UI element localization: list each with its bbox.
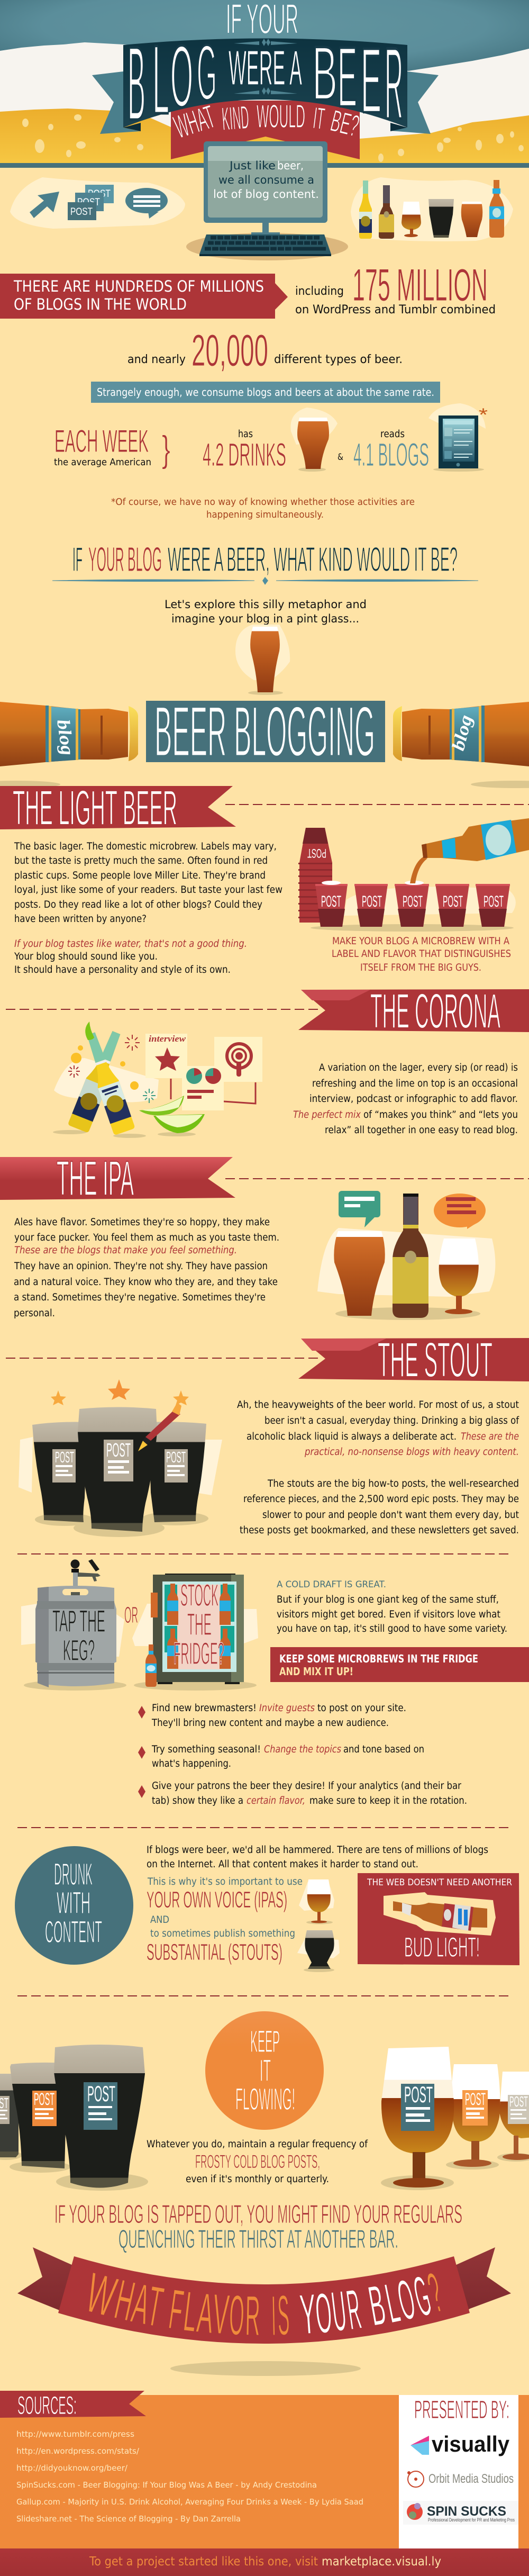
- text: stout body: These are the: [461, 1431, 519, 1442]
- icon: stacked posts: POST: [70, 206, 93, 218]
- front bottle: [80, 1030, 135, 1135]
- ribbon: what flavor is your blog: B: [364, 2273, 390, 2338]
- source list: http://en.wordpress.com/stats/: [16, 2446, 140, 2456]
- foam: [0, 42, 529, 139]
- icon: stacked posts: POST: [77, 197, 100, 208]
- source list: http://www.tumblr.com/press: [16, 2429, 134, 2439]
- banner: hundreds of millions of blogs: THERE ARE HUNDREDS OF MILLIONS: [13, 277, 264, 295]
- orange bottle: [489, 180, 504, 238]
- ribbon: what flavor is your blog: [17, 2247, 511, 2347]
- heading: if your blog were a beer: [72, 540, 458, 579]
- badge: keep it flowing: IT: [260, 2054, 271, 2088]
- red sub ribbon with WHAT KIND WOULD IT BE?: IT: [311, 101, 326, 136]
- cup 4: POST: [443, 893, 463, 910]
- bullet: change the topics: and tone based on: [343, 1744, 424, 1755]
- pencil: [138, 1403, 181, 1451]
- illustration: five post cups: [311, 881, 516, 932]
- shadow under ribbon: [170, 2361, 361, 2376]
- stat: 20,000 types of beer: and nearly: [127, 353, 186, 366]
- icon: desktop computer with text: lot of blog content.: [213, 188, 319, 201]
- bullet: invite guests: Find new brewmasters!: [152, 1703, 257, 1714]
- card: infographic: [182, 1066, 224, 1110]
- source list: SpinSucks.com - Beer Blogging: If Your Blog Was A Beer - by Andy Crestodina: [16, 2480, 317, 2490]
- text: light beer body: If your blog tastes like water, that's not a good thing.: [14, 938, 247, 950]
- beer bubbles: [22, 114, 524, 162]
- bullet: certain flavor: certain flavor,: [247, 1795, 305, 1806]
- red sub ribbon with WHAT KIND WOULD IT BE?: KIND: [221, 100, 250, 138]
- illustration: bottle by fridge: [145, 1644, 157, 1687]
- cup 5: [476, 884, 510, 927]
- text: a cold draft: A COLD DRAFT IS GREAT.: [277, 1579, 386, 1590]
- bottle: [393, 1194, 428, 1318]
- text: corona body: [293, 1062, 518, 1136]
- cup 5: POST: [484, 893, 504, 910]
- callout: keep some microbrews: AND MIX IT UP!: [279, 1665, 353, 1678]
- cup 2: POST: [362, 893, 382, 910]
- caption: microbrew: MAKE YOUR BLOG A MICROBREW WITH A: [332, 936, 509, 947]
- ribbon: what flavor is your blog: R: [343, 2277, 364, 2342]
- illustration: keg: TAP THE: [52, 1604, 105, 1639]
- ribbon: what flavor is your blog: I: [271, 2284, 276, 2347]
- illustration: fridge: THE: [187, 1607, 212, 1642]
- red sub ribbon with WHAT KIND WOULD IT BE?: [170, 98, 362, 159]
- banner: sources: SOURCES:: [17, 2392, 77, 2420]
- card: interview: [145, 1034, 187, 1078]
- wine glass: [402, 202, 421, 230]
- illustration: row of beers: [351, 177, 513, 241]
- illustration: three stouts with stars and pencil: [19, 1379, 222, 1537]
- ribbon: what flavor is your blog: U: [329, 2279, 350, 2343]
- badge: keep it flowing: KEEP: [250, 2024, 280, 2059]
- goblet far: [499, 2072, 529, 2160]
- logo: spin sucks: SPIN SUCKS: [427, 2504, 506, 2519]
- footnote: *Of course, we have no way of knowing whether those activities are: [111, 496, 415, 508]
- banner: the stout: [298, 1332, 529, 1387]
- tap: [71, 1559, 101, 1587]
- text: light beer body: plastic cups. Some people love Miller Lite. They're brand: [14, 870, 266, 881]
- banner: the light beer: [0, 780, 236, 835]
- divider with diamond: [52, 577, 478, 585]
- text: ipa body: These are the blogs that make you feel something.: [14, 1245, 237, 1256]
- card: interview: interview: [149, 1034, 186, 1044]
- caption: microbrew: [332, 936, 511, 973]
- badge: keep it flowing: FLOWING!: [235, 2082, 295, 2117]
- illustration: stacked red cups: [298, 828, 332, 923]
- left stout: [32, 1422, 87, 1522]
- illustration: corona bottles, lime and content cards: [53, 1022, 262, 1138]
- goblet big: [381, 2047, 454, 2188]
- stat: 4.2 drinks: 4.2 DRINKS: [203, 437, 286, 473]
- header scene: sky, foam and beer: [0, 0, 529, 168]
- wine glass: [439, 1239, 479, 1297]
- bullet: change the topics: Try something seasonal!: [151, 1744, 261, 1755]
- icon: stacked posts: POST: [88, 188, 111, 200]
- stat: 4.2 drinks: has: [238, 429, 253, 440]
- text: ipa body: your face pucker. You feel them as much as you taste them.: [14, 1232, 279, 1243]
- heading: if your blog were a beer: IF: [72, 540, 83, 579]
- pint: [334, 1231, 385, 1316]
- text: a cold draft: [277, 1579, 507, 1634]
- bullet: change the topics: what's happening.: [152, 1758, 231, 1769]
- text: light beer body: have been written by anyone?: [14, 914, 147, 925]
- logo: spin sucks: [403, 2501, 518, 2525]
- banner: the corona: [298, 983, 529, 1038]
- title ribbon: BLOG WERE A BEER: B: [312, 31, 338, 116]
- ribbon: what flavor is your blog: L: [380, 2271, 404, 2335]
- text: drunk with content body: on the Internet. All that content makes it harder to stand out.: [147, 1859, 418, 1870]
- illustration: three stouts left: [0, 2045, 148, 2191]
- red sub ribbon with WHAT KIND WOULD IT BE?: BE?: [327, 104, 362, 143]
- text: drunk with content body: to sometimes publish something: [150, 1928, 295, 1939]
- illustration: left bottle: blog: [53, 718, 77, 756]
- title ribbon: BLOG WERE A BEER: B: [127, 25, 145, 142]
- title ribbon: BLOG WERE A BEER: R: [385, 26, 403, 140]
- badge: drunk with content: CONTENT: [45, 1915, 102, 1949]
- panel: presented by: [399, 2395, 518, 2548]
- text: drunk with content body: AND: [150, 1914, 169, 1926]
- bullet: invite guests: [138, 1703, 406, 1729]
- cup 3: POST: [403, 893, 423, 910]
- bullet: invite guests: Invite guests: [259, 1703, 315, 1714]
- text: frosty cold blog posts: Whatever you do, maintain a regular frequency of: [147, 2139, 368, 2150]
- bullet: invite guests: to post on your site.: [317, 1703, 406, 1714]
- ribbon: what flavor is your blog: H: [110, 2267, 140, 2333]
- stat: 20,000 types of beer: 20,000: [191, 326, 268, 375]
- ribbon: what flavor is your blog: T: [143, 2274, 167, 2339]
- icon: speech bubble: [125, 188, 168, 219]
- text: ipa body: [14, 1217, 279, 1319]
- source list: Gallup.com - Majority in U.S. Drink Alcohol, Averaging Four Drinks a Week - By Lydia Saad: [16, 2497, 363, 2507]
- text: stout body: [237, 1399, 519, 1536]
- bullet: certain flavor: Give your patrons the beer they desire! If your analytics (and their bar: [152, 1780, 461, 1792]
- illustration: keg: KEG?: [63, 1633, 95, 1667]
- stars: [51, 1390, 66, 1405]
- cup 4: [435, 884, 469, 927]
- corona bottle: [359, 180, 372, 239]
- bullet: certain flavor: [138, 1780, 467, 1806]
- speech bubble orange: [434, 1194, 486, 1229]
- banner: the ipa: THE IPA: [57, 1151, 134, 1206]
- text: drunk with content body: [147, 1845, 488, 1965]
- text: corona body: The perfect mix: [293, 1109, 361, 1120]
- pint glass: [461, 202, 482, 237]
- text: ipa body: personal.: [14, 1308, 55, 1319]
- banner: the light beer: THE LIGHT BEER: [13, 780, 177, 835]
- illustration: three goblets right: [381, 2047, 529, 2190]
- stat: 20,000 types of beer: [127, 326, 403, 375]
- callout: same rate: Strangely enough, we consume blogs and beers at about the same rate.: [97, 386, 434, 399]
- callout: the web doesn't need another bud light: THE WEB DOESN'T NEED ANOTHER: [367, 1877, 512, 1888]
- illustration: left bottle: [0, 702, 138, 766]
- ribbon: what flavor is your blog: ?: [422, 2261, 449, 2325]
- icon: desktop computer with text: [186, 141, 348, 260]
- icon: stacked posts: [68, 185, 114, 220]
- text: drunk with content body: This is why it's so important to use: [147, 1876, 303, 1887]
- footnote: happening simultaneously.: [206, 509, 324, 520]
- stat: 175 million: including: [295, 285, 344, 298]
- stout glass: [428, 199, 454, 238]
- center stout: [78, 1407, 157, 1532]
- goblet middle: POST: [465, 2090, 486, 2109]
- title ribbon: BLOG WERE A BEER: [92, 25, 439, 142]
- badge: keep it flowing: [205, 2011, 324, 2130]
- banner: hundreds of millions of blogs: [0, 274, 288, 319]
- text: stout body: alcoholic black liquid is always a deliberate act.: [247, 1431, 457, 1442]
- lime wedges: [139, 1096, 184, 1115]
- bullet: change the topics: Change the topics: [264, 1744, 341, 1755]
- stat: 175 million: on WordPress and Tumblr combined: [295, 303, 496, 317]
- icon: desktop computer with text: Just like: [229, 159, 276, 172]
- text: light beer body: The basic lager. The domestic microbrew. Labels may vary,: [14, 841, 277, 852]
- source list: http://didyouknow.org/beer/: [16, 2463, 128, 2473]
- text: ipa body: Ales have flavor. Sometimes they're so hoppy, they make: [14, 1217, 270, 1228]
- illustration: fridge: [132, 1574, 258, 1691]
- ribbon: what flavor is your blog: S: [277, 2283, 290, 2347]
- text: ampersand: &: [338, 452, 343, 463]
- ribbon: what flavor is your blog: W: [80, 2261, 122, 2329]
- ribbon: what flavor is your blog: R: [245, 2284, 261, 2347]
- labels: POST: [55, 1449, 74, 1466]
- footnote: [111, 496, 415, 520]
- ribbon: what flavor is your blog: O: [228, 2283, 245, 2347]
- red sub ribbon with WHAT KIND WOULD IT BE?: WOULD: [257, 98, 305, 135]
- ribbon: what flavor is your blog: F: [166, 2277, 187, 2342]
- labels: [52, 1439, 188, 1483]
- ribbon: what flavor is your blog: O: [392, 2267, 421, 2333]
- bullet: certain flavor: make sure to keep it in the rotation.: [309, 1795, 467, 1806]
- callout: keep some microbrews: KEEP SOME MICROBREWS IN THE FRIDGE: [279, 1652, 478, 1665]
- speech bubble green: [339, 1191, 380, 1227]
- red sub ribbon with WHAT KIND WOULD IT BE?: WHAT: [170, 98, 220, 146]
- stat: 4.1 blogs: *: [479, 405, 488, 425]
- title ribbon: BLOG WERE A BEER: E: [361, 29, 381, 132]
- brown bottle: [379, 185, 394, 239]
- right stout: [149, 1422, 206, 1522]
- panel: footer sources: [0, 2391, 529, 2548]
- intro text: [165, 598, 367, 626]
- illustration: fridge: FRIDGE?: [174, 1637, 224, 1671]
- stat: 4.1 blogs: 4.1 BLOGS: [353, 437, 429, 473]
- stat: 4.1 blogs: [353, 403, 488, 473]
- icon: desktop computer with text: beer,: [277, 159, 304, 172]
- ribbon: what flavor is your blog: A: [127, 2271, 155, 2336]
- cup 1: [315, 881, 348, 927]
- intro text: imagine your blog in a pint glass...: [171, 612, 359, 626]
- callout: the web doesn't need another bud light: [358, 1873, 519, 1965]
- intro text: Let's explore this silly metaphor and: [165, 598, 367, 611]
- icons: arrow, posts and speech bubble: [10, 177, 185, 229]
- illustration: small stout glass: [297, 1930, 340, 1972]
- title ribbon: BLOG WERE A BEER: G: [197, 29, 217, 116]
- stat: each week: [54, 423, 170, 469]
- stat: 175 million: [295, 260, 496, 317]
- callout: keep some microbrews: [270, 1647, 529, 1682]
- text: light beer body: loyal, just like some of your readers. But taste your last few: [14, 884, 282, 896]
- text: drunk with content body: YOUR OWN VOICE (IPAS): [147, 1887, 287, 1913]
- illustration: small ipa glass: [299, 1879, 334, 1924]
- title ribbon: BLOG WERE A BEER: O: [170, 28, 193, 125]
- connector lines: [171, 1079, 256, 1104]
- text: OR: [124, 1602, 138, 1628]
- illustration: right bottle: [393, 702, 529, 766]
- logo: visually: visually: [432, 2432, 510, 2456]
- sparks: [68, 1035, 140, 1078]
- illustration: keg: [21, 1559, 126, 1691]
- text: frosty cold blog posts: [147, 2139, 368, 2185]
- rear bottle: [68, 1028, 126, 1133]
- ribbon: what flavor is your blog: L: [180, 2279, 200, 2344]
- text: light beer body: posts. Do they read like a lot of other blogs? Could they: [14, 899, 262, 910]
- card: podcast: [214, 1037, 262, 1082]
- goblet big: POST: [404, 2082, 433, 2108]
- text: light beer body: [14, 841, 282, 975]
- labels: POST: [106, 1439, 131, 1461]
- title ribbon: BLOG WERE A BEER: L: [152, 25, 169, 134]
- stat: 4.2 drinks: [203, 408, 338, 473]
- bullet: invite guests: They'll bring new content and maybe a new audience.: [151, 1718, 389, 1729]
- logo: orbit media studios: [407, 2471, 514, 2487]
- badge: drunk with content: WITH: [57, 1886, 90, 1920]
- source list: Slideshare.net - The Science of Blogging - By Dan Zarrella: [16, 2514, 241, 2524]
- text: light beer body: Your blog should sound like you.: [14, 951, 158, 962]
- illustration: fridge: STOCK: [180, 1578, 218, 1613]
- cup 2: [354, 884, 388, 927]
- illustration: three stouts left: POST: [87, 2081, 115, 2106]
- text: drunk with content body: SUBSTANTIAL (STOUTS): [147, 1939, 282, 1965]
- shadows under bottles: [0, 781, 529, 788]
- stat: each week: the average American: [54, 457, 151, 468]
- ribbon: what flavor is your blog: V: [211, 2282, 231, 2346]
- bullet: change the topics: [138, 1744, 424, 1769]
- title ribbon: BLOG WERE A BEER: E: [338, 30, 357, 125]
- footer bar: To get a project started like this one, visit: [89, 2555, 318, 2569]
- text: a cold draft: visitors might get bored. Even if visitors love what: [277, 1609, 500, 1620]
- text: a cold draft: you have on tap, it's still good to have some variety.: [277, 1623, 507, 1634]
- bullet: certain flavor: tab) show they like a: [152, 1795, 243, 1806]
- bud bottle: [393, 1901, 487, 1931]
- text: light beer body: It should have a personality and style of its own.: [14, 964, 231, 975]
- ribbon: what flavor is your blog: Y: [298, 2282, 318, 2346]
- labels: POST: [166, 1449, 186, 1466]
- badge: drunk with content: DRUNK: [54, 1857, 93, 1892]
- ribbon: what flavor is your blog: A: [195, 2281, 216, 2345]
- text: frosty cold blog posts: FROSTY COLD BLOG POSTS,: [195, 2152, 320, 2172]
- fridge bottles: [167, 1584, 231, 1669]
- stat: each week: EACH WEEK: [54, 423, 149, 459]
- lime slice: [85, 1022, 94, 1040]
- heading: if your blog were a beer: YOUR BLOG: [88, 540, 162, 579]
- text: ipa body: and a natural voice. They know who they are, and they take: [14, 1277, 278, 1288]
- text: frosty cold blog posts: even if it's monthly or quarterly.: [186, 2174, 329, 2185]
- ribbon: what flavor is your blog: O: [313, 2281, 334, 2345]
- panel: beer blogging title: [146, 692, 385, 771]
- illustration: three stouts left: POST: [34, 2090, 54, 2109]
- text: light beer body: but the taste is pretty much the same. Often found in red: [14, 855, 268, 866]
- illustration: stacked red cups: POST: [307, 846, 326, 860]
- title ribbon: BLOG WERE A BEER: WERE A: [229, 40, 302, 95]
- footer bar: marketplace.visual.ly: [322, 2555, 441, 2569]
- text: a cold draft: But if your blog is one giant keg of the same stuff,: [277, 1594, 499, 1605]
- icon: desktop computer with text: we all consume a: [218, 174, 314, 186]
- footer bar: [0, 2548, 529, 2576]
- illustration: right bottle: blog: [449, 713, 476, 753]
- cup 1: POST: [321, 893, 341, 910]
- stat: 20,000 types of beer: different types of beer.: [274, 353, 403, 366]
- callout: same rate: [91, 382, 440, 403]
- caption: microbrew: ITSELF FROM THE BIG GUYS.: [360, 962, 481, 973]
- source list: [16, 2429, 363, 2524]
- ribbon ornaments: [234, 39, 297, 95]
- stat: 4.1 blogs: reads: [380, 429, 405, 440]
- illustration: center pint glass: [235, 625, 290, 695]
- text: drunk with content body: If blogs were beer, we'd all be hammered. There are tens of millions of blogs: [147, 1845, 488, 1856]
- cup 3: [395, 881, 429, 927]
- closing text: tapped out: [54, 2200, 462, 2254]
- stat: each week: }: [162, 428, 170, 469]
- illustration: pouring bottle: [410, 818, 529, 883]
- text: ipa body: They have an opinion. They're not shy. They have passion: [14, 1261, 268, 1272]
- ribbon: what flavor is your blog: G: [408, 2264, 436, 2328]
- badge: drunk with content: [15, 1846, 133, 1965]
- icon: arrow: [30, 192, 59, 218]
- illustration: ipa glasses and bottle: [317, 1191, 495, 1320]
- text: ipa body: a stand. Sometimes they're negative. Sometimes they're: [14, 1292, 266, 1303]
- goblet middle: [451, 2064, 500, 2167]
- banner: hundreds of millions of blogs: OF BLOGS IN THE WORLD: [14, 295, 187, 313]
